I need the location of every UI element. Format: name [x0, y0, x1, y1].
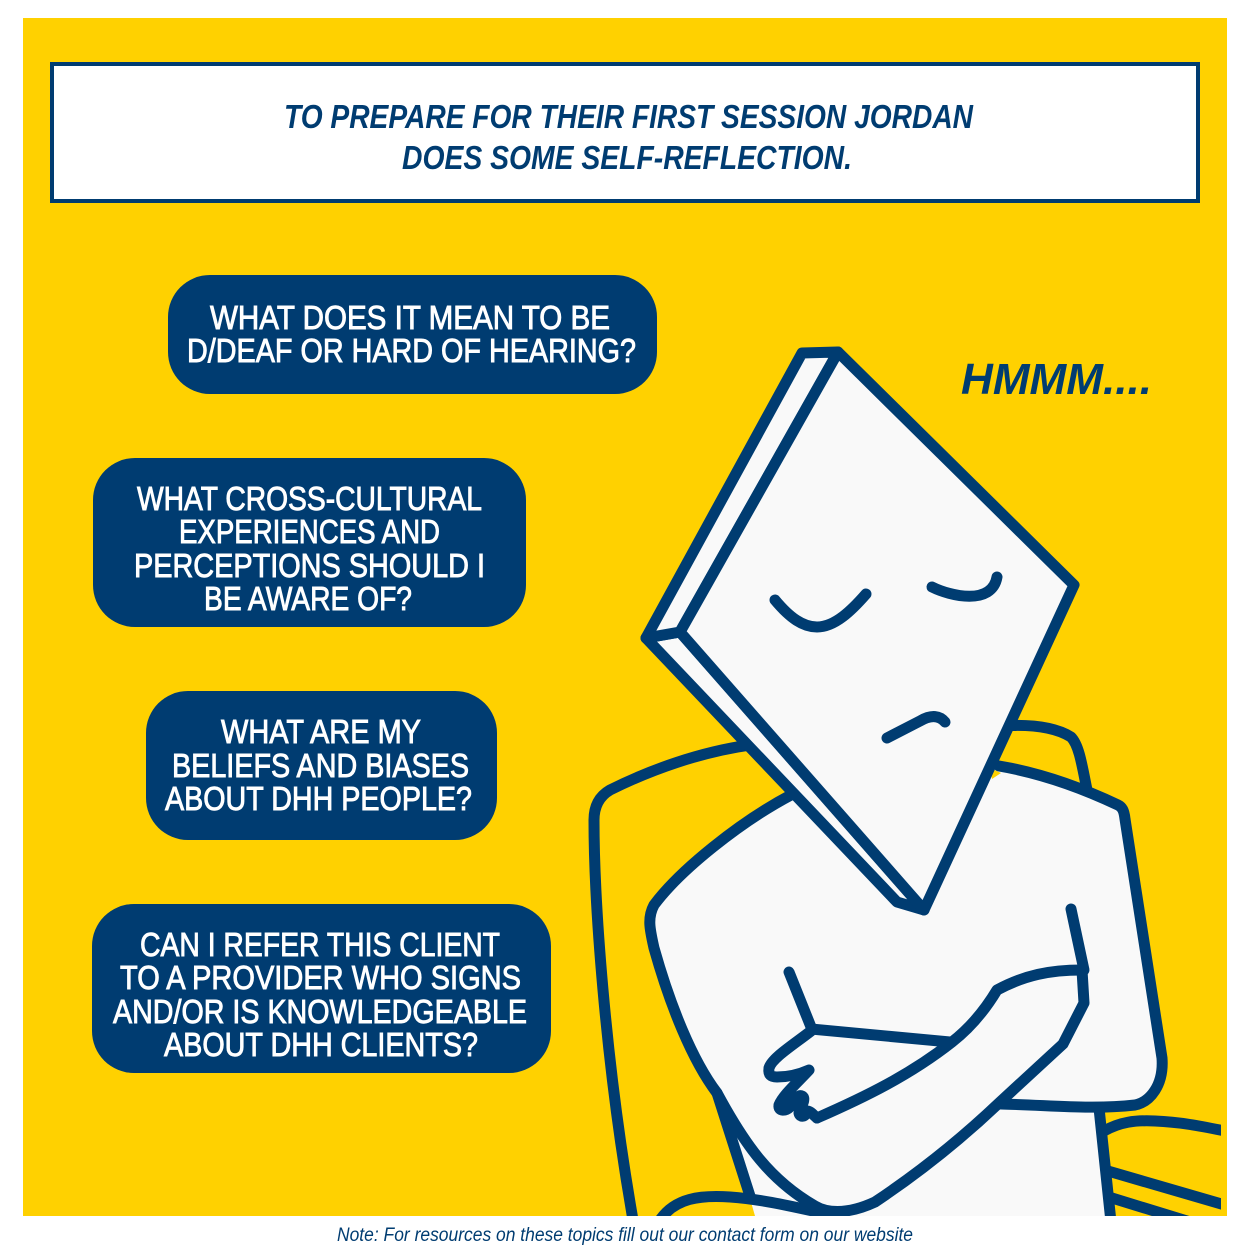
question bubble 1: WHAT DOES IT MEAN TO BE: [210, 299, 610, 336]
illustration: person with book over face: [594, 352, 1225, 1225]
title text: DOES SOME SELF-REFLECTION.: [402, 139, 852, 176]
question bubble 2: BE AWARE OF?: [204, 580, 412, 617]
question bubble 4: TO A PROVIDER WHO SIGNS: [120, 959, 521, 996]
chair and collar behind the person: [594, 725, 1225, 1225]
icon: book covering the face: [646, 352, 1074, 910]
question bubble 4: AND/OR IS KNOWLEDGEABLE: [113, 993, 527, 1030]
question bubble 4: ABOUT DHH CLIENTS?: [164, 1026, 478, 1063]
small yellow gap beside the neck: [992, 770, 1001, 779]
title box: [52, 64, 1198, 201]
torso and arm fill: [650, 765, 1162, 1216]
question bubble 3: ABOUT DHH PEOPLE?: [165, 780, 472, 817]
question bubble 3: [146, 691, 497, 840]
question bubble 1: [168, 275, 657, 394]
question bubble 2: EXPERIENCES AND: [179, 513, 440, 550]
thought text: hmmm: HMMM....: [961, 355, 1152, 404]
question bubble 2: WHAT CROSS-CULTURAL: [137, 480, 482, 517]
title text: TO PREPARE FOR THEIR FIRST SESSION JORDAN: [284, 98, 974, 135]
footnote: Note: For resources on these topics fill out our contact form on our website: [337, 1225, 913, 1246]
folded arms and hand: [769, 909, 1084, 1118]
question bubble 3: WHAT ARE MY: [221, 713, 421, 750]
torso outline: [650, 766, 1162, 1222]
question bubble 3: BELIEFS AND BIASES: [172, 747, 469, 784]
question bubble 2: PERCEPTIONS SHOULD I: [134, 547, 485, 584]
question bubble 2: [93, 458, 526, 627]
question bubble 4: CAN I REFER THIS CLIENT: [140, 926, 500, 963]
question bubble 1: D/DEAF OR HARD OF HEARING?: [187, 332, 636, 369]
face: closed eyes and frown: [775, 577, 997, 738]
title text: [284, 98, 974, 176]
question bubble 4: [92, 904, 551, 1073]
